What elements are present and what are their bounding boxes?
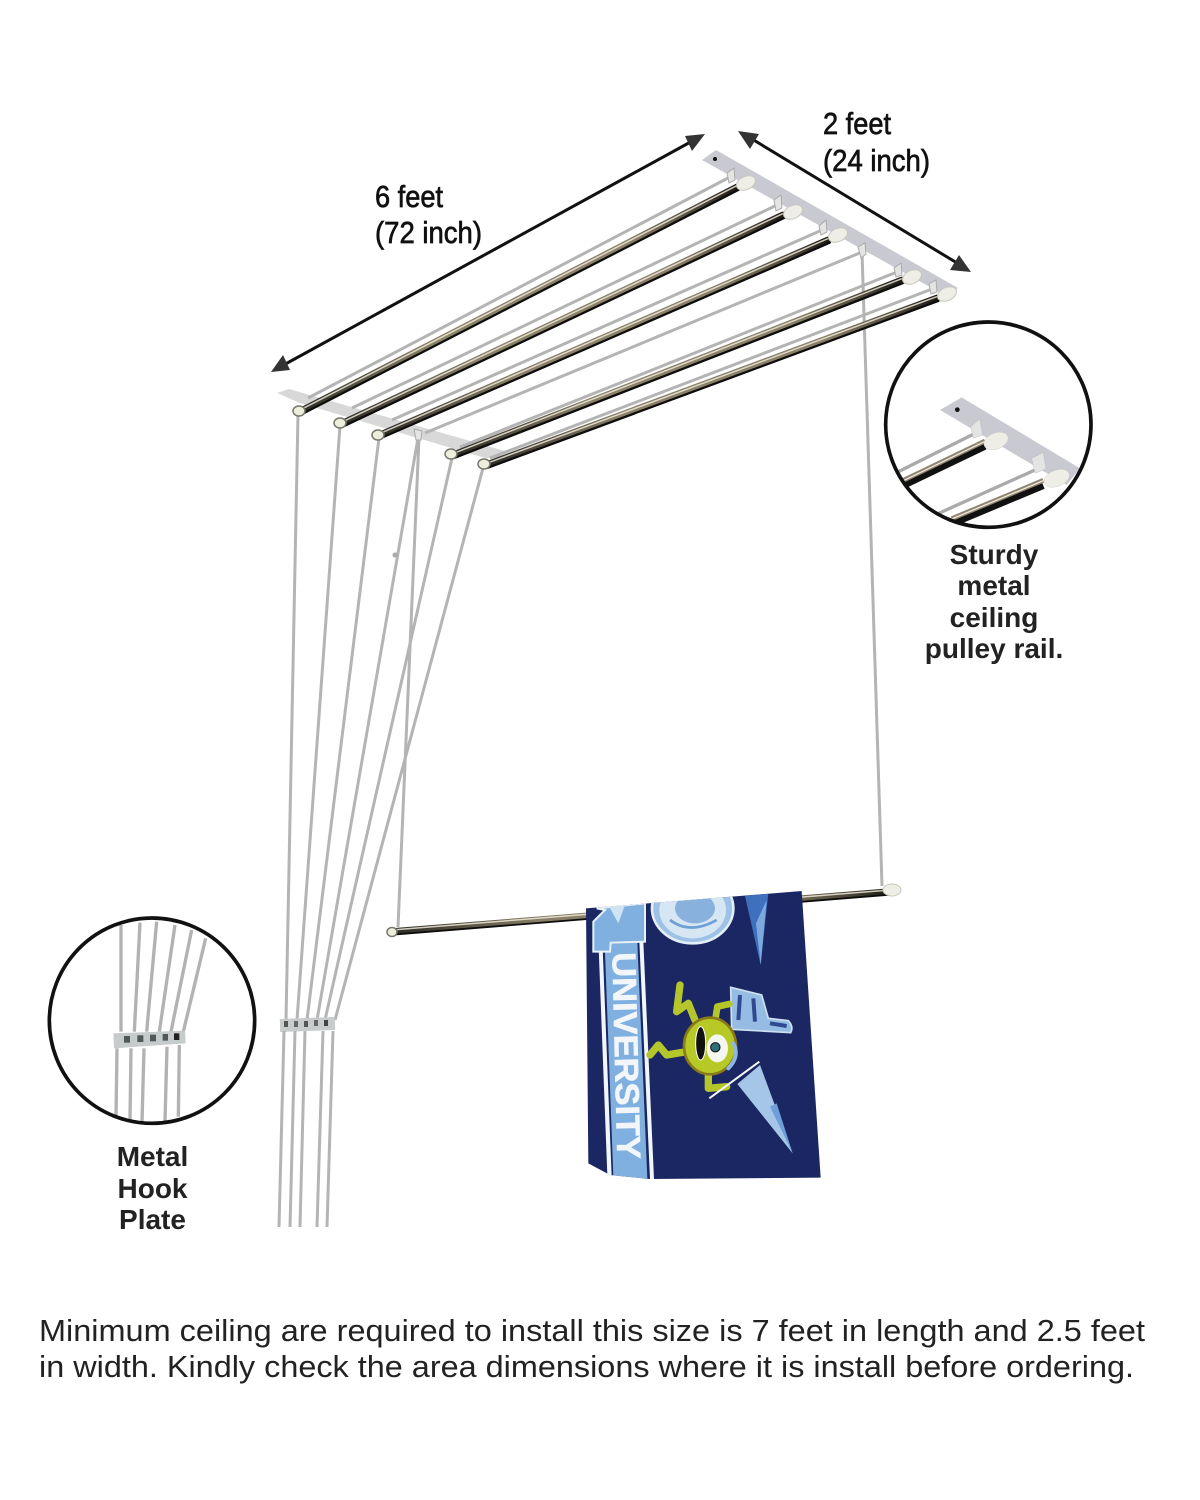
installation note: Minimum ceiling are required to install this size is 7 feet in length and 2.5 feet [39,1313,1145,1348]
cables below hook plate [279,1031,333,1227]
drying rods [298,186,938,467]
caption: pulley rail: metal [957,570,1031,601]
dimension label: 6 feet: (72 inch) [375,215,482,250]
inset circle: metal hook plate [49,918,255,1123]
dimension label: 2 feet: 2 feet [823,106,891,141]
inset circle: ceiling pulley rail [886,322,1091,527]
hanging cables from left rail to hook plate [286,252,882,1020]
rod end caps and hooks [293,168,959,469]
dimension arrow: 2 feet width [738,131,971,272]
towel: university stripe [593,903,654,1179]
towel: university stripe: UNIVERSITY [604,952,646,1159]
towel: pennant with pole [709,1062,793,1153]
hook plate on wall [280,1017,335,1032]
caption: metal hook plate: Metal [117,1141,188,1172]
lowered rod [387,884,901,936]
caption: metal hook plate: Hook [118,1173,188,1204]
dimension label: 2 feet [823,106,930,178]
towel: foam finger [731,987,792,1033]
dimension label: 6 feet [375,179,482,250]
dimension label: 6 feet: 6 feet [375,179,443,214]
installation note: in width. Kindly check the area dimensions where it is install before ordering. [39,1349,1134,1384]
caption: pulley rail: Sturdy [950,539,1039,570]
left ceiling rail [277,389,505,458]
towel: monster character [650,985,736,1088]
caption: pulley rail [925,539,1063,664]
towel [586,873,821,1179]
installation note [39,1313,1145,1384]
caption: pulley rail: ceiling [950,602,1038,633]
caption: metal hook plate: Plate [119,1204,186,1235]
towel: pennant top [745,893,768,965]
ceiling drying rack [277,150,959,469]
caption: pulley rail: pulley rail. [925,633,1063,664]
towel: crest [650,896,735,945]
thin roof cables [308,177,932,458]
caption: metal hook plate [117,1141,188,1235]
dimension arrow: 6 feet length [271,134,705,372]
dimension label: 2 feet: (24 inch) [823,143,930,178]
right ceiling rail [702,150,958,296]
